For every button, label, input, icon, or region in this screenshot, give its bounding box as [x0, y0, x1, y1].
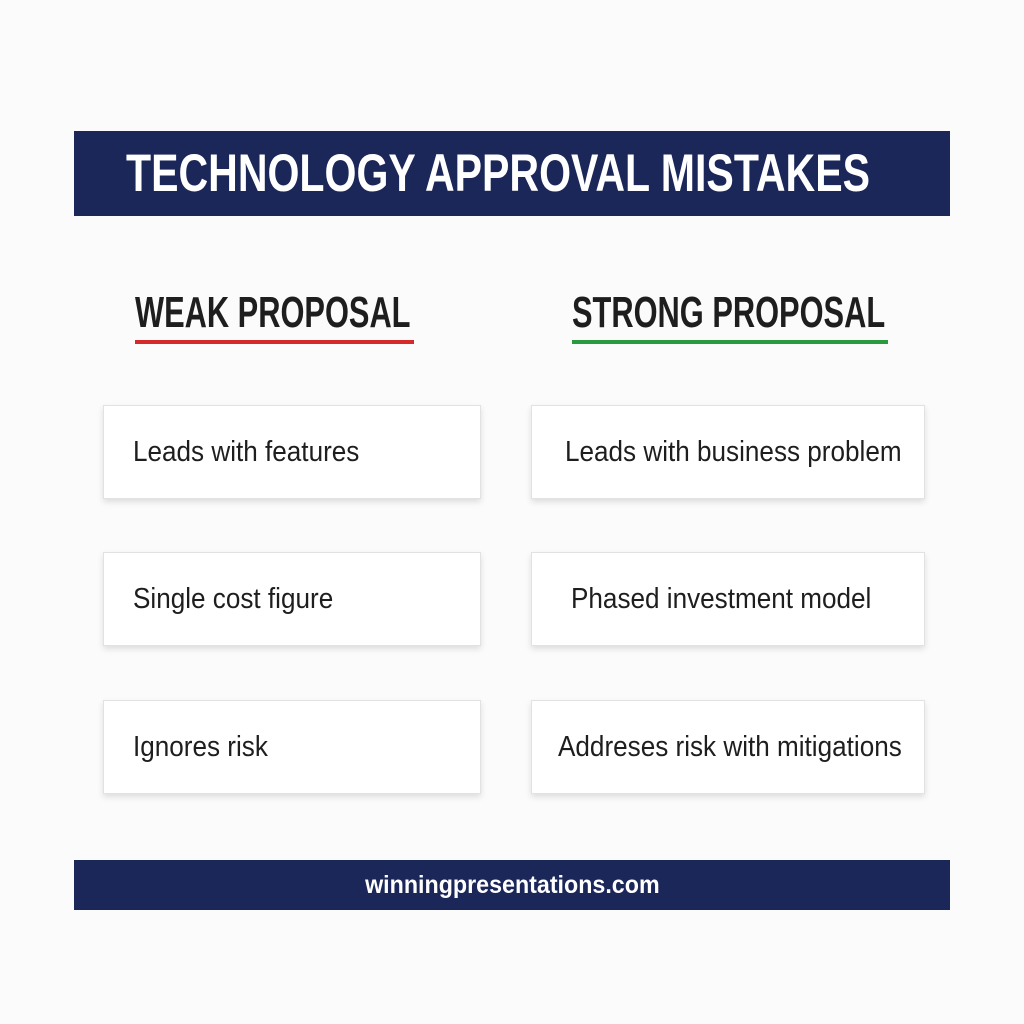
- card: ignores risk: [103, 700, 481, 794]
- heading: weak proposal: WEAK PROPOSAL: [135, 288, 411, 337]
- card: ignores risk: Ignores risk: [133, 730, 268, 762]
- card: leads with features: [103, 405, 481, 499]
- card: leads with features: Leads with features: [133, 436, 359, 468]
- title banner: TECHNOLOGY APPROVAL MISTAKES: [126, 144, 870, 203]
- card: phased investment model: Phased investment model: [571, 582, 871, 614]
- footer banner: winningpresentations.com: [365, 871, 659, 899]
- card: addresses risk: Addreses risk with mitigations: [558, 730, 902, 762]
- footer banner: [74, 860, 950, 910]
- card: leads with business problem: [531, 405, 925, 499]
- title banner: [74, 131, 950, 216]
- heading: strong proposal: STRONG PROPOSAL: [572, 288, 885, 337]
- card: phased investment model: [531, 552, 925, 646]
- card: addresses risk: [531, 700, 925, 794]
- card: single cost figure: [103, 552, 481, 646]
- card: leads with business problem: Leads with business problem: [565, 436, 902, 468]
- card: single cost figure: Single cost figure: [133, 582, 333, 614]
